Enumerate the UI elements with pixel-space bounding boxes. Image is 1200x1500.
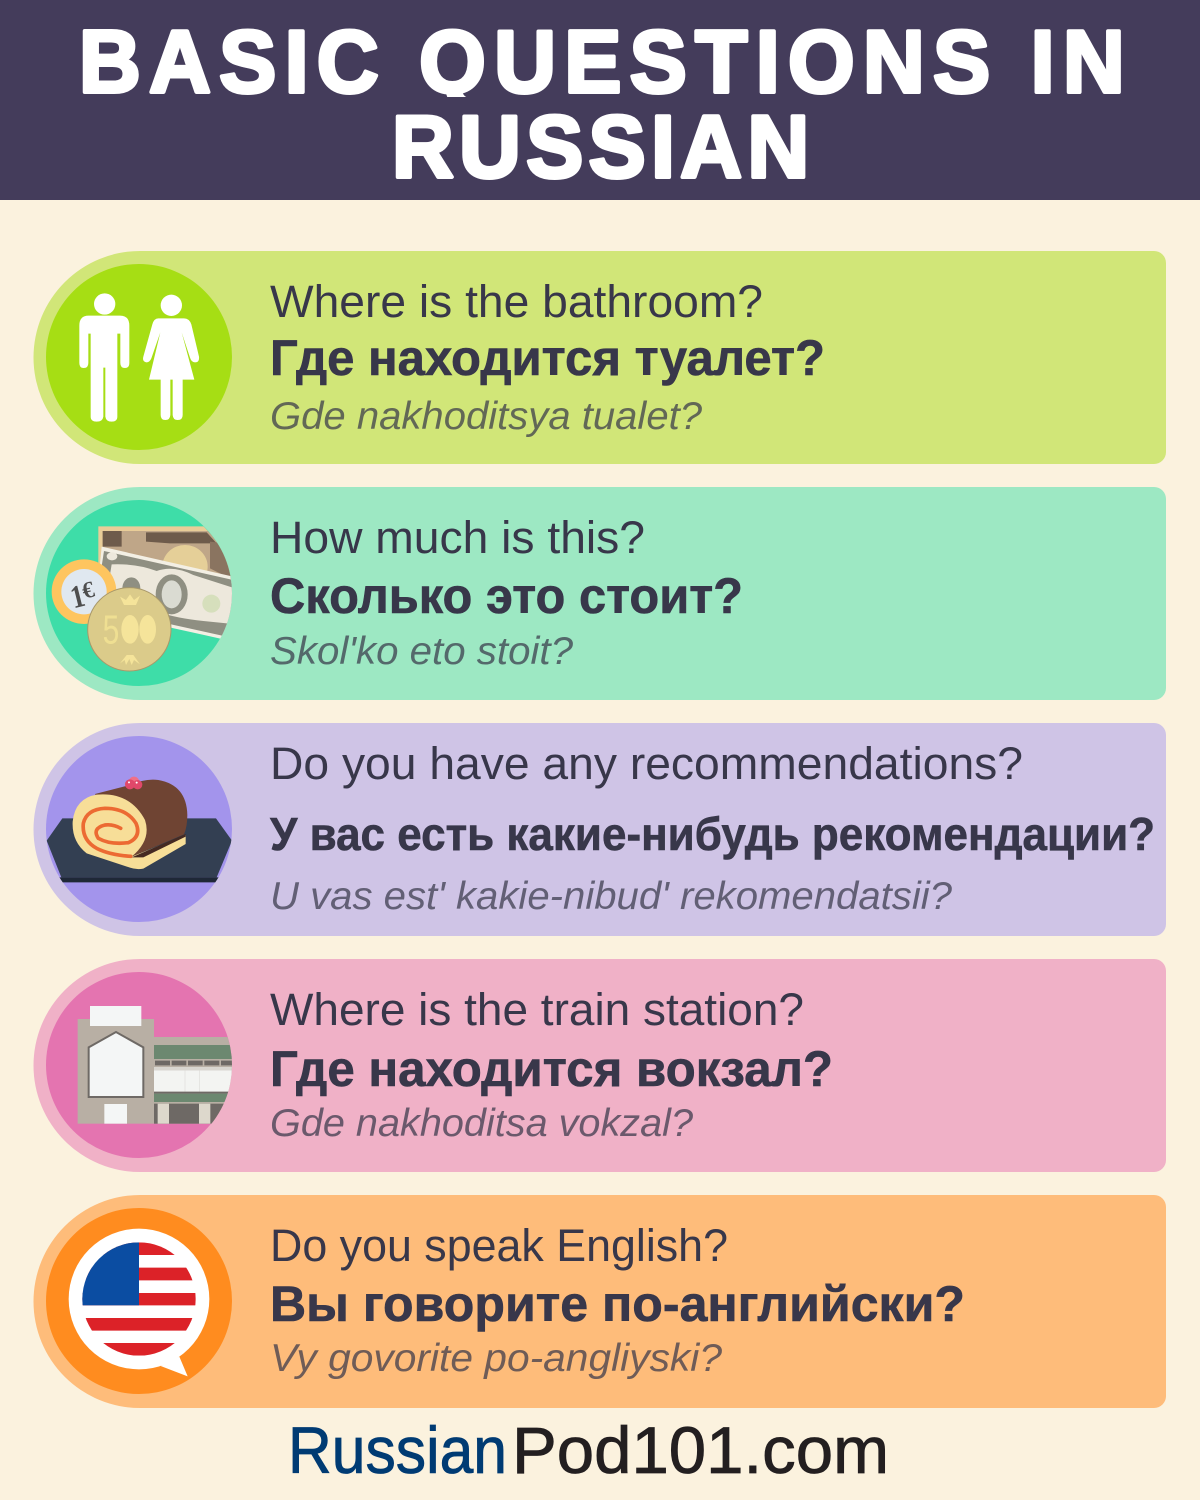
text: where is the train station: Где находится вокзал? xyxy=(270,1041,833,1097)
text: recommendations: Do you have any recommendations? xyxy=(270,738,1023,789)
text: do you speak English: Vy govorite po-angliyski? xyxy=(270,1337,722,1380)
text: where is the train station: Where is the train station? xyxy=(270,984,804,1035)
text: where is the bathroom: Где находится туалет? xyxy=(270,330,825,386)
icon: swiss roll cake xyxy=(47,777,232,882)
icon: banknotes and coins: 1 xyxy=(67,577,88,615)
title banner xyxy=(0,0,1200,200)
logo: RussianPod101.com xyxy=(288,1413,889,1487)
panel: do you speak English xyxy=(34,1195,1166,1408)
text: do you speak English: Do you speak English? xyxy=(270,1220,728,1271)
icon: banknotes and coins xyxy=(52,526,243,671)
text: recommendations: U vas est' kakie-nibud' rekomendatsii? xyxy=(270,875,952,918)
text: do you speak English: Вы говорите по-английски? xyxy=(270,1276,965,1332)
logo: RussianPod101.com: Russian xyxy=(288,1413,507,1487)
text: how much is this: Skol'ko eto stoit? xyxy=(270,630,573,673)
title xyxy=(82,28,1121,180)
text: where is the bathroom: Where is the bathroom? xyxy=(270,276,763,327)
icon: train station building xyxy=(78,1006,237,1124)
text: how much is this: Сколько это стоит? xyxy=(270,568,743,624)
panel: where is the bathroom xyxy=(34,251,1166,464)
text: where is the bathroom: Gde nakhoditsya tualet? xyxy=(270,395,702,438)
panel: how much is this xyxy=(34,487,1166,700)
logo: RussianPod101.com: Pod101.com xyxy=(512,1413,889,1487)
icon: banknotes and coins: € xyxy=(79,577,97,605)
panel: where is the train station xyxy=(34,959,1166,1172)
text: where is the bathroom xyxy=(270,276,825,438)
icon: banknotes and coins: 5 xyxy=(103,607,119,653)
text: how much is this: How much is this? xyxy=(270,512,645,563)
text: recommendations: У вас есть какие-нибудь рекомендации? xyxy=(270,808,1155,860)
text: how much is this xyxy=(270,512,743,673)
icon: restroom man and woman xyxy=(79,293,199,422)
title: BASIC QUESTIONS IN xyxy=(79,14,1125,111)
title: RUSSIAN xyxy=(392,99,809,196)
text: where is the train station xyxy=(270,984,833,1145)
panel: recommendations xyxy=(34,723,1166,936)
icon: US flag speech bubble xyxy=(69,1229,209,1376)
text: do you speak English xyxy=(270,1220,965,1380)
text: recommendations xyxy=(270,738,1155,918)
text: where is the train station: Gde nakhoditsa vokzal? xyxy=(270,1102,693,1145)
